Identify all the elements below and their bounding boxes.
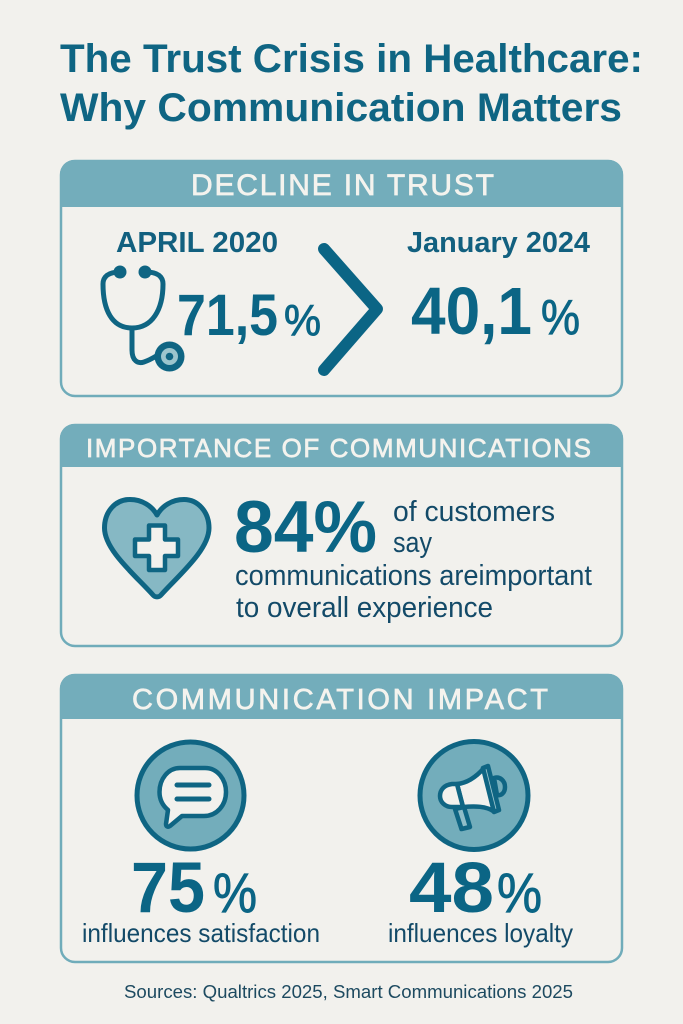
title: Why Communication Matters xyxy=(60,86,622,130)
title xyxy=(60,37,643,130)
text: influences satisfaction: influences satisfaction xyxy=(82,918,320,948)
stat: 75%: % xyxy=(213,861,257,924)
text: of customers say communications are important xyxy=(235,496,592,624)
stat: 48%: 48 xyxy=(409,849,494,928)
icon: stethoscope xyxy=(103,266,184,372)
label: January 2024: January 2024 xyxy=(407,227,590,259)
stat: 71,5%: % xyxy=(284,296,321,345)
stat: 75%: 75 xyxy=(131,849,205,928)
text: of customers say communications are important: communications areimportant xyxy=(235,560,592,592)
panel header: decline in trust: DECLINE IN TRUST xyxy=(191,169,494,202)
stat: 71,5%: 71,5 xyxy=(177,283,278,348)
text: of customers say communications are important: say xyxy=(393,527,432,559)
panel: decline in trust xyxy=(60,160,623,396)
stat: 75% xyxy=(131,849,257,928)
panel header: decline in trust xyxy=(60,160,623,207)
icon: speech bubble xyxy=(137,742,244,849)
sources footer: Sources: Qualtrics 2025, Smart Communications 2025 xyxy=(124,982,573,1002)
icon: megaphone xyxy=(420,742,528,850)
panel: communication impact xyxy=(60,674,623,962)
panel header: importance of communications xyxy=(60,424,623,467)
label: April 2020: APRIL 2020 xyxy=(116,227,278,259)
panel header: communication impact xyxy=(60,674,623,719)
stat: 84%: 84% xyxy=(234,487,377,568)
arrow: chevron xyxy=(324,249,377,370)
text: of customers say communications are important: of customers xyxy=(393,496,555,528)
panel: importance of communications xyxy=(60,424,623,646)
panel header: importance of communications: IMPORTANCE OF COMMUNICATIONS xyxy=(86,433,591,463)
stat: 48% xyxy=(409,849,542,928)
panel header: communication impact: COMMUNICATION IMPACT xyxy=(132,684,548,716)
stat: 40,1%: 40,1 xyxy=(411,274,532,349)
text: influences loyalty: influences loyalty xyxy=(388,918,573,948)
text: of customers say communications are important: to overall experience xyxy=(236,592,493,624)
icon: heart with cross xyxy=(104,500,209,597)
title: The Trust Crisis in Healthcare: xyxy=(60,37,643,81)
stat: 40,1%: % xyxy=(541,291,580,345)
stat: 48%: % xyxy=(497,861,542,924)
